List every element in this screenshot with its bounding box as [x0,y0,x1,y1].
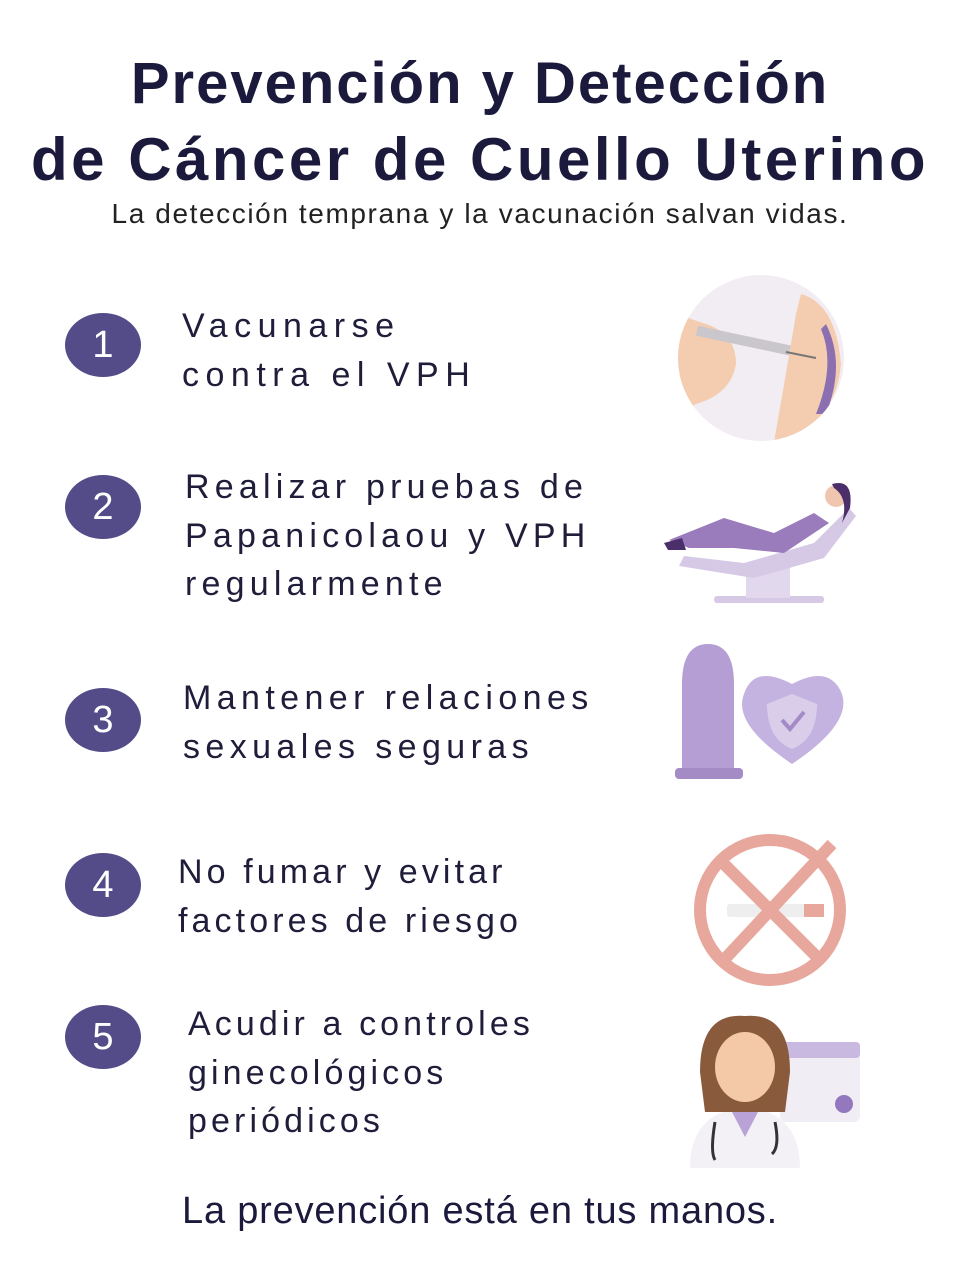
text 5: periódicos [188,1102,384,1140]
icon: no smoking [694,834,846,986]
badge 2 [65,475,141,539]
text 3: Mantener relaciones [183,679,594,717]
badge 4 [65,853,141,917]
title: de Cáncer de Cuello Uterino [31,126,929,193]
footer: La prevención está en tus manos. [182,1190,778,1232]
icon: condom and shield heart [675,644,844,779]
text 2 [185,468,590,603]
icon: vaccine [678,275,844,441]
text 4: factores de riesgo [178,902,522,940]
text 5: ginecológicos [188,1054,447,1092]
badge 4: 4 [92,864,114,906]
text 2: regularmente [185,565,448,603]
text 4 [178,853,522,940]
text 3 [183,679,594,766]
badge 1 [65,313,141,377]
text 1: contra el VPH [182,356,476,394]
text 5: Acudir a controles [188,1005,534,1043]
text 4: No fumar y evitar [178,853,507,891]
badge 3: 3 [92,699,114,741]
icon: exam chair [664,483,856,603]
badge 1: 1 [92,324,114,366]
badge 3 [65,688,141,752]
badge 5: 5 [92,1016,114,1058]
badge 2: 2 [92,486,114,528]
text 5 [188,1005,534,1140]
text 3: sexuales seguras [183,728,534,766]
text 1: Vacunarse [182,307,401,345]
badge 5 [65,1005,141,1069]
icon: doctor and calendar [690,1016,860,1168]
text 2: Papanicolaou y VPH [185,516,590,554]
title: Prevención y Detección [131,51,829,116]
text 1 [182,307,476,394]
subtitle: La detección temprana y la vacunación salvan vidas. [112,198,848,229]
text 2: Realizar pruebas de [185,468,588,506]
title [31,51,929,193]
